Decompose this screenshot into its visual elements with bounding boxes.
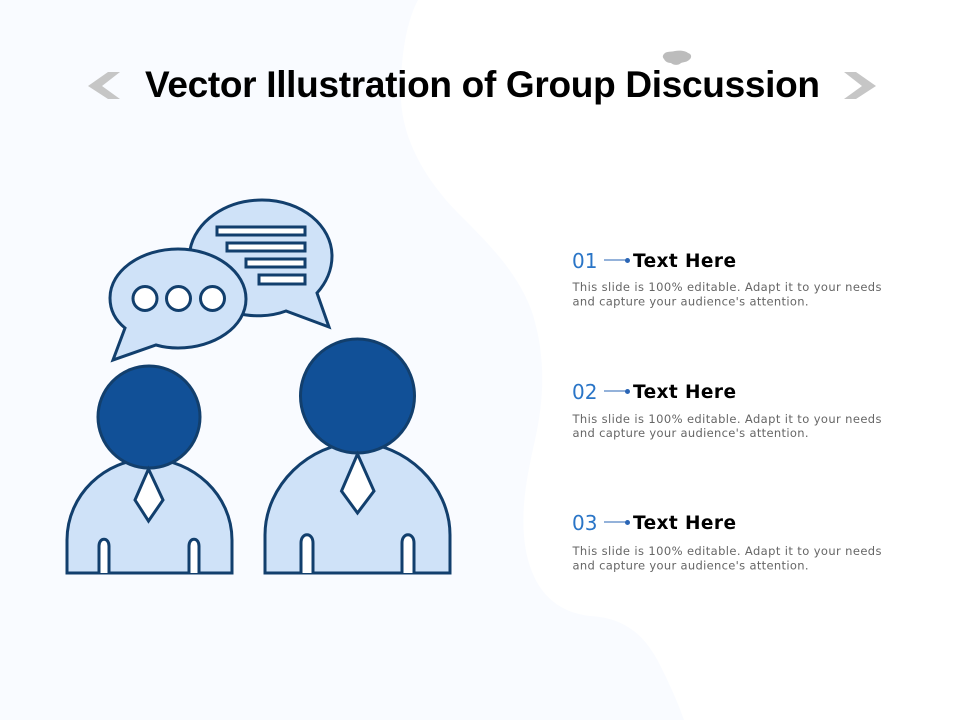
heading 03: Text Here — [633, 513, 736, 534]
description 02: and capture your audience's attention. — [572, 426, 808, 440]
background blob — [0, 0, 684, 720]
number 01: 01 — [572, 249, 597, 273]
icon: right chevron — [844, 72, 876, 99]
description 01: This slide is 100% editable. Adapt it to your needs — [572, 280, 882, 294]
connector 02 — [604, 389, 630, 394]
item 01 — [572, 249, 882, 308]
number 02: 02 — [572, 380, 597, 404]
icon: left chevron — [88, 72, 120, 99]
heading 02: Text Here — [633, 382, 736, 403]
connector 01 — [604, 258, 630, 263]
connector 03 — [604, 520, 630, 525]
description 03: and capture your audience's attention. — [572, 558, 808, 572]
icon: grey smudge — [663, 51, 691, 65]
item 03 — [572, 511, 882, 572]
description 01: and capture your audience's attention. — [572, 294, 808, 308]
item 02 — [572, 380, 882, 440]
icon: left person — [67, 366, 232, 573]
illustration: group discussion — [67, 200, 450, 573]
description 03: This slide is 100% editable. Adapt it to your needs — [572, 544, 882, 558]
title: Vector Illustration of Group Discussion — [145, 64, 820, 105]
icon: right person — [265, 339, 450, 573]
description 02: This slide is 100% editable. Adapt it to your needs — [572, 412, 882, 426]
heading 01: Text Here — [633, 251, 736, 272]
icon: right speech bubble — [190, 200, 332, 327]
icon: left speech bubble — [110, 249, 246, 360]
number 03: 03 — [572, 511, 597, 535]
